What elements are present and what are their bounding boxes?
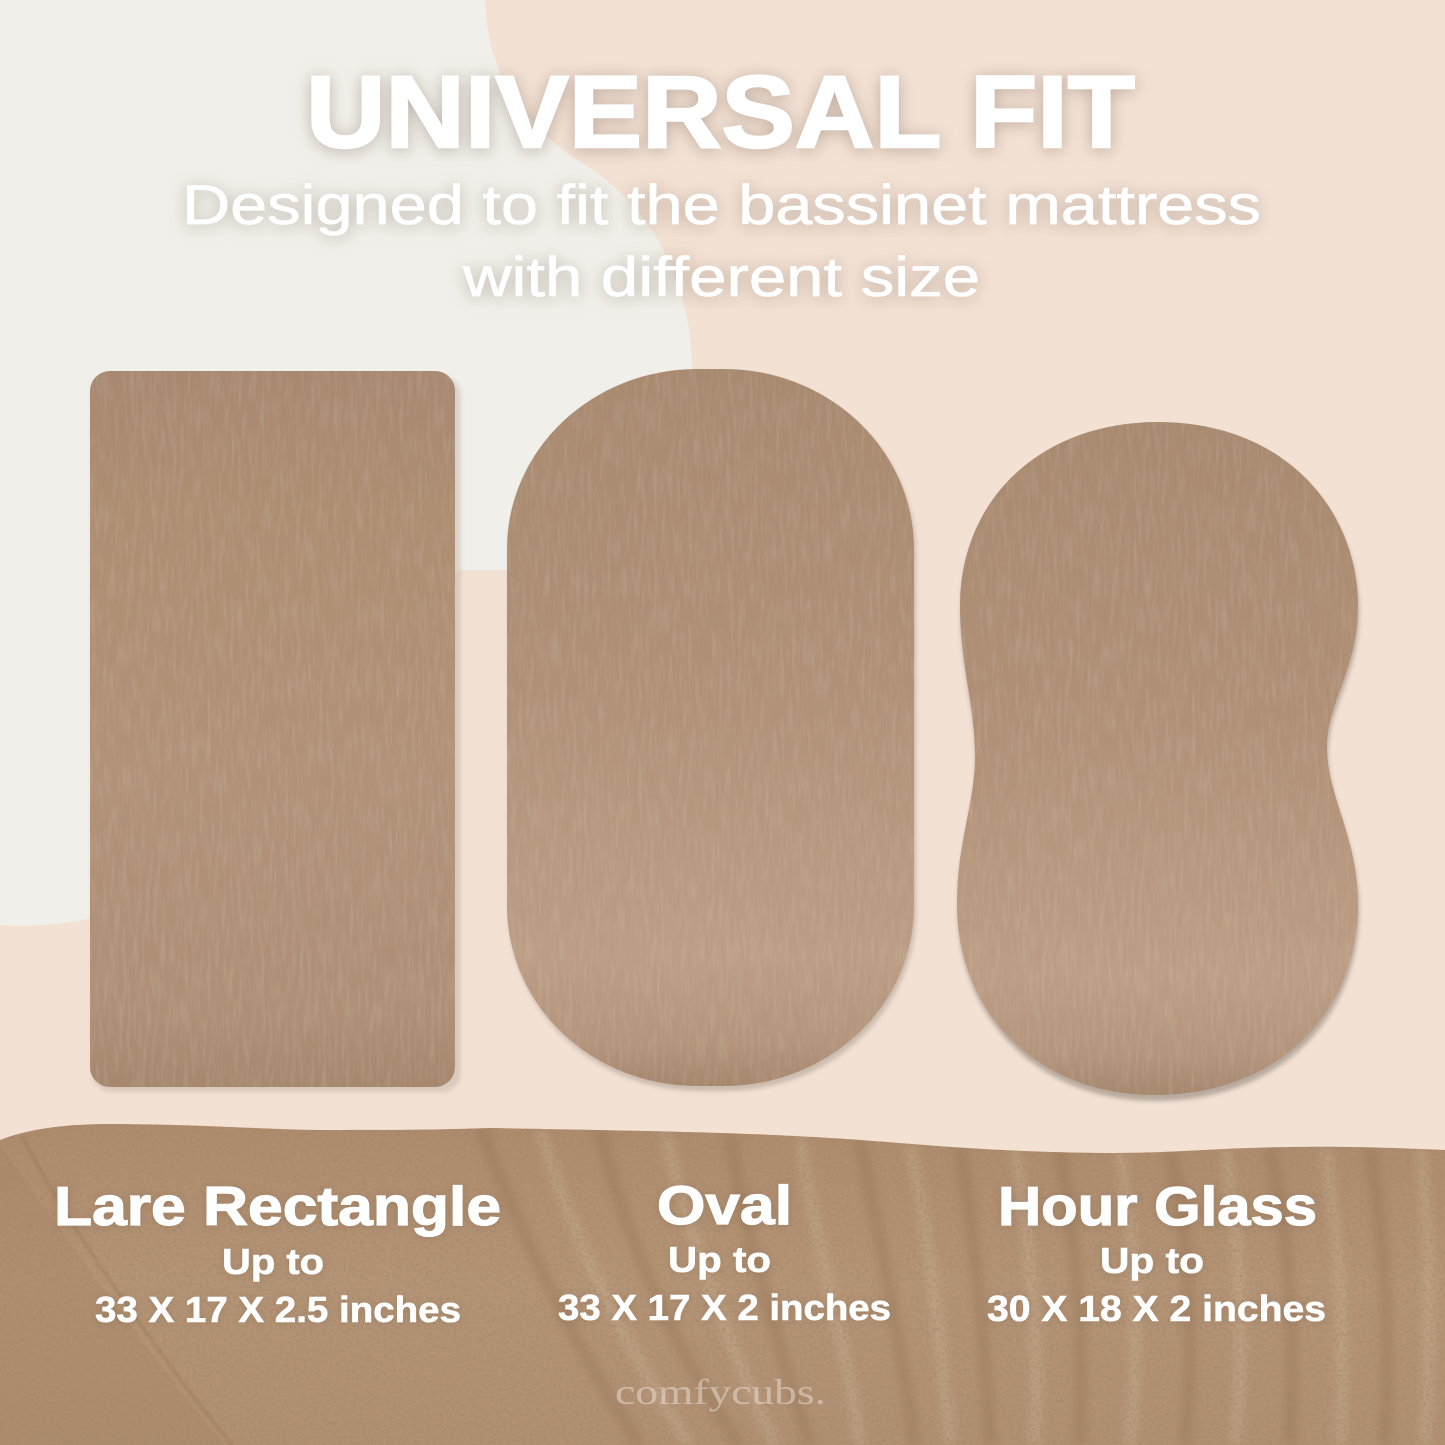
subtitle: Designed to fit the bassinet mattress bbox=[182, 173, 1261, 236]
title: UNIVERSAL FIT bbox=[306, 55, 1135, 169]
label: large rectangle: 33 X 17 X 2.5 inches bbox=[95, 1289, 461, 1330]
brand watermark: comfycubs. bbox=[615, 1372, 826, 1412]
label: large rectangle bbox=[54, 1175, 501, 1330]
label: hour glass: Hour Glass bbox=[998, 1175, 1317, 1237]
background: cream blob bbox=[0, 0, 692, 926]
sheet: large rectangle bbox=[90, 371, 461, 1092]
label: hour glass: Up to bbox=[1100, 1240, 1204, 1281]
label: oval: Up to bbox=[668, 1239, 771, 1280]
subtitle: with different size bbox=[462, 245, 980, 308]
label: oval: 33 X 17 X 2 inches bbox=[558, 1287, 891, 1328]
label: oval bbox=[558, 1174, 891, 1328]
label: large rectangle: Lare Rectangle bbox=[54, 1175, 501, 1237]
draped muslin fabric bbox=[0, 1120, 1445, 1445]
sheet: hour glass bbox=[957, 422, 1359, 1101]
label: oval: Oval bbox=[657, 1174, 792, 1236]
label: hour glass: 30 X 18 X 2 inches bbox=[987, 1288, 1326, 1329]
label: large rectangle: Up to bbox=[222, 1241, 324, 1282]
subtitle bbox=[182, 173, 1261, 308]
label: hour glass bbox=[987, 1175, 1326, 1329]
sheet: oval bbox=[507, 369, 916, 1091]
